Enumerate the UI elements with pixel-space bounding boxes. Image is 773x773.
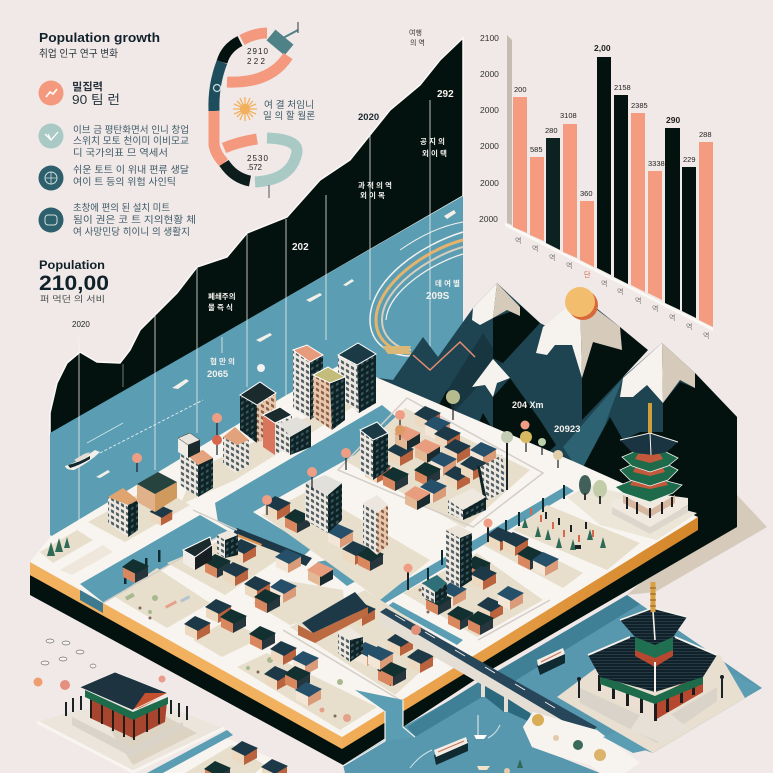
bar chart values: 200 <box>514 85 527 94</box>
small palace trees and birds <box>34 639 166 690</box>
chart annotations on ridge and river: 202 <box>292 242 309 253</box>
platform top surface <box>30 362 698 737</box>
chart annotations on ridge and river: 외 이 목 <box>360 190 385 200</box>
stat item 3: 쉬운 토트 이 위내 편류 생달 <box>73 164 189 176</box>
platform side: front-right orange band <box>342 517 698 749</box>
chart vertical guide lines <box>79 100 430 528</box>
bar chart values: 288 <box>699 130 712 139</box>
chart annotations on ridge and river: 협 만 의 <box>210 356 235 366</box>
bar chart category labels: 단 <box>584 270 591 279</box>
bar chart y axis labels: 2000 <box>480 69 499 79</box>
shoreline <box>523 712 640 773</box>
bar chart category labels: 역 <box>635 296 641 305</box>
canals <box>80 405 574 645</box>
donut labels: 2910 <box>247 47 269 56</box>
bar chart values: 2385 <box>631 101 648 110</box>
bar chart category labels: 역 <box>669 313 675 322</box>
chart annotations on ridge and river <box>72 28 460 380</box>
shadow beside the city block <box>627 495 767 595</box>
bar chart <box>479 33 713 340</box>
bar chart category labels: 역 <box>532 244 538 253</box>
boats on river <box>65 210 456 478</box>
chart annotations on ridge and river: 공 지 의 <box>420 136 445 146</box>
tower row, front <box>338 525 472 662</box>
bar chart y axis labels: 2000 <box>479 214 498 224</box>
stat item 1: 90 팀 런 <box>72 93 120 107</box>
pagoda lamps <box>577 675 724 698</box>
harbor scene inside the curve <box>382 346 411 354</box>
title block: Population growth <box>39 30 160 45</box>
bar chart y axis labels: 2000 <box>480 141 499 151</box>
bar chart values: 585 <box>530 145 543 154</box>
bar chart values: 2158 <box>614 83 631 92</box>
area chart: black population ridge <box>50 38 463 435</box>
darker water near wall <box>407 595 640 737</box>
bar chart y axis labels <box>479 33 499 224</box>
marker dot on river <box>257 364 265 372</box>
bar chart axis <box>505 35 713 331</box>
lot ground details <box>125 588 430 722</box>
bar chart category labels: 역 <box>652 304 658 313</box>
tower row, back <box>178 343 376 497</box>
chart annotations on ridge and river: 209S <box>426 291 450 302</box>
sun note <box>263 99 315 122</box>
chart annotations on ridge and river: 의 역 <box>410 38 425 47</box>
chart annotations on ridge and river: 2065 <box>207 369 229 380</box>
long hall <box>298 592 368 643</box>
stat item 4: 여 사망민당 히이니 의 생활지 <box>73 226 190 238</box>
bar chart category labels: 역 <box>515 236 521 245</box>
stat item 2: 이브 금 평탄화면서 인니 창업 <box>73 124 189 136</box>
gray road rings <box>103 398 550 700</box>
chart annotations on ridge and river: 데 여 별 <box>435 278 460 288</box>
chart annotations on ridge and river: 2020 <box>358 112 379 123</box>
chart annotations on ridge and river: 과 적 의 역 <box>358 180 392 190</box>
city lots <box>40 390 640 730</box>
icon: sun over peak <box>565 287 598 320</box>
canal cut face <box>80 590 103 613</box>
bar chart category labels: 역 <box>601 279 607 288</box>
donut labels: 2530 <box>247 154 269 163</box>
houses <box>122 406 559 706</box>
chart annotations on ridge and river: 폐쇄주의 <box>208 291 236 301</box>
bar chart values: 3108 <box>560 111 577 120</box>
small line chart over mountains <box>413 342 475 370</box>
small palace grounds <box>37 700 224 773</box>
ferries and boats on lake <box>410 648 565 773</box>
bar chart category labels: 역 <box>686 322 692 331</box>
population figure: 210,00 <box>39 272 109 295</box>
bar chart values: 360 <box>580 189 593 198</box>
tower row, middle <box>108 422 507 570</box>
bar chart y axis labels: 2000 <box>480 178 499 188</box>
mountains <box>378 283 737 530</box>
river in the area chart <box>50 196 463 560</box>
donut labels: 222 <box>247 57 266 66</box>
icon: sun <box>233 97 257 121</box>
round trees <box>132 390 563 590</box>
bar chart bars <box>513 57 713 327</box>
chart annotations on ridge and river: 여행 <box>409 28 422 37</box>
population figure <box>39 260 109 304</box>
stat item 4: 됨이 권은 코 트 지의현황 체 <box>73 214 196 226</box>
pagoda back lot <box>567 485 697 540</box>
canal outlet to lake <box>343 690 415 766</box>
sun note: 여 결 처임니 <box>264 99 314 111</box>
small palace <box>65 672 188 757</box>
stat item 2: 디 국가의표 므 역세서 <box>73 148 168 159</box>
bar chart values: 280 <box>545 126 558 135</box>
park with trees and people <box>47 475 607 556</box>
stat item 4: 초창에 편의 된 설치 미트 <box>73 202 170 214</box>
chart annotations on ridge and river: 외 이 택 <box>422 148 447 158</box>
stat item 2: 스위치 모토 천이미 이비모교 <box>73 135 189 147</box>
donut path chart <box>214 22 298 198</box>
curved river stripes <box>370 222 463 356</box>
population figure: Population <box>39 260 105 272</box>
shore trees <box>532 714 606 761</box>
bar chart values: 2,00 <box>594 43 611 53</box>
bar chart values: 229 <box>683 155 696 164</box>
stat item 4 <box>38 202 196 238</box>
small multi-tier pagoda on the hill <box>612 403 688 534</box>
chart annotations on ridge and river: 2020 <box>72 320 90 329</box>
title block <box>39 30 160 60</box>
chart annotations on ridge and river: 292 <box>437 89 454 100</box>
sun note: 일 의 할 월론 <box>263 110 315 122</box>
donut labels <box>247 47 269 172</box>
bar chart category labels: 역 <box>617 287 623 296</box>
river posts <box>124 485 565 584</box>
stat item 2 <box>38 124 189 159</box>
bar chart y axis labels: 2100 <box>480 33 499 43</box>
bar chart category labels: 역 <box>703 331 709 340</box>
bar chart values: 3338 <box>648 159 665 168</box>
population figure: 퍼 먹던 의 서비 <box>40 294 105 304</box>
lake <box>343 595 762 773</box>
bridge <box>380 608 597 748</box>
long canal-side shed <box>232 528 312 566</box>
mountain labels: 20923 <box>554 424 580 435</box>
mountain labels <box>512 400 580 435</box>
bottom canal and lot <box>147 730 288 773</box>
bar chart values: 290 <box>666 115 680 125</box>
mountain labels: 204 Xm <box>512 400 544 410</box>
bar chart category labels: 역 <box>549 253 555 262</box>
stat item 1: 밀집력 <box>72 80 103 93</box>
towers <box>108 343 507 662</box>
donut labels: .572 <box>247 163 263 172</box>
large pagoda plaza <box>557 655 760 753</box>
stat item 3 <box>38 164 189 190</box>
title block: 취업 인구 연구 변화 <box>39 47 118 60</box>
chart annotations on ridge and river: 물 즉 식 <box>208 302 233 312</box>
bar chart category labels <box>515 236 709 340</box>
platform side: front-left orange band <box>30 562 342 749</box>
bar chart y axis labels: 2000 <box>480 105 499 115</box>
stat item 1 <box>38 80 120 107</box>
platform side: black base <box>30 490 737 765</box>
large pagoda <box>580 582 717 743</box>
bar chart values <box>514 43 712 198</box>
bar chart category labels: 역 <box>566 261 572 270</box>
stat item 3: 여이 트 등의 위험 사인틱 <box>73 176 176 188</box>
